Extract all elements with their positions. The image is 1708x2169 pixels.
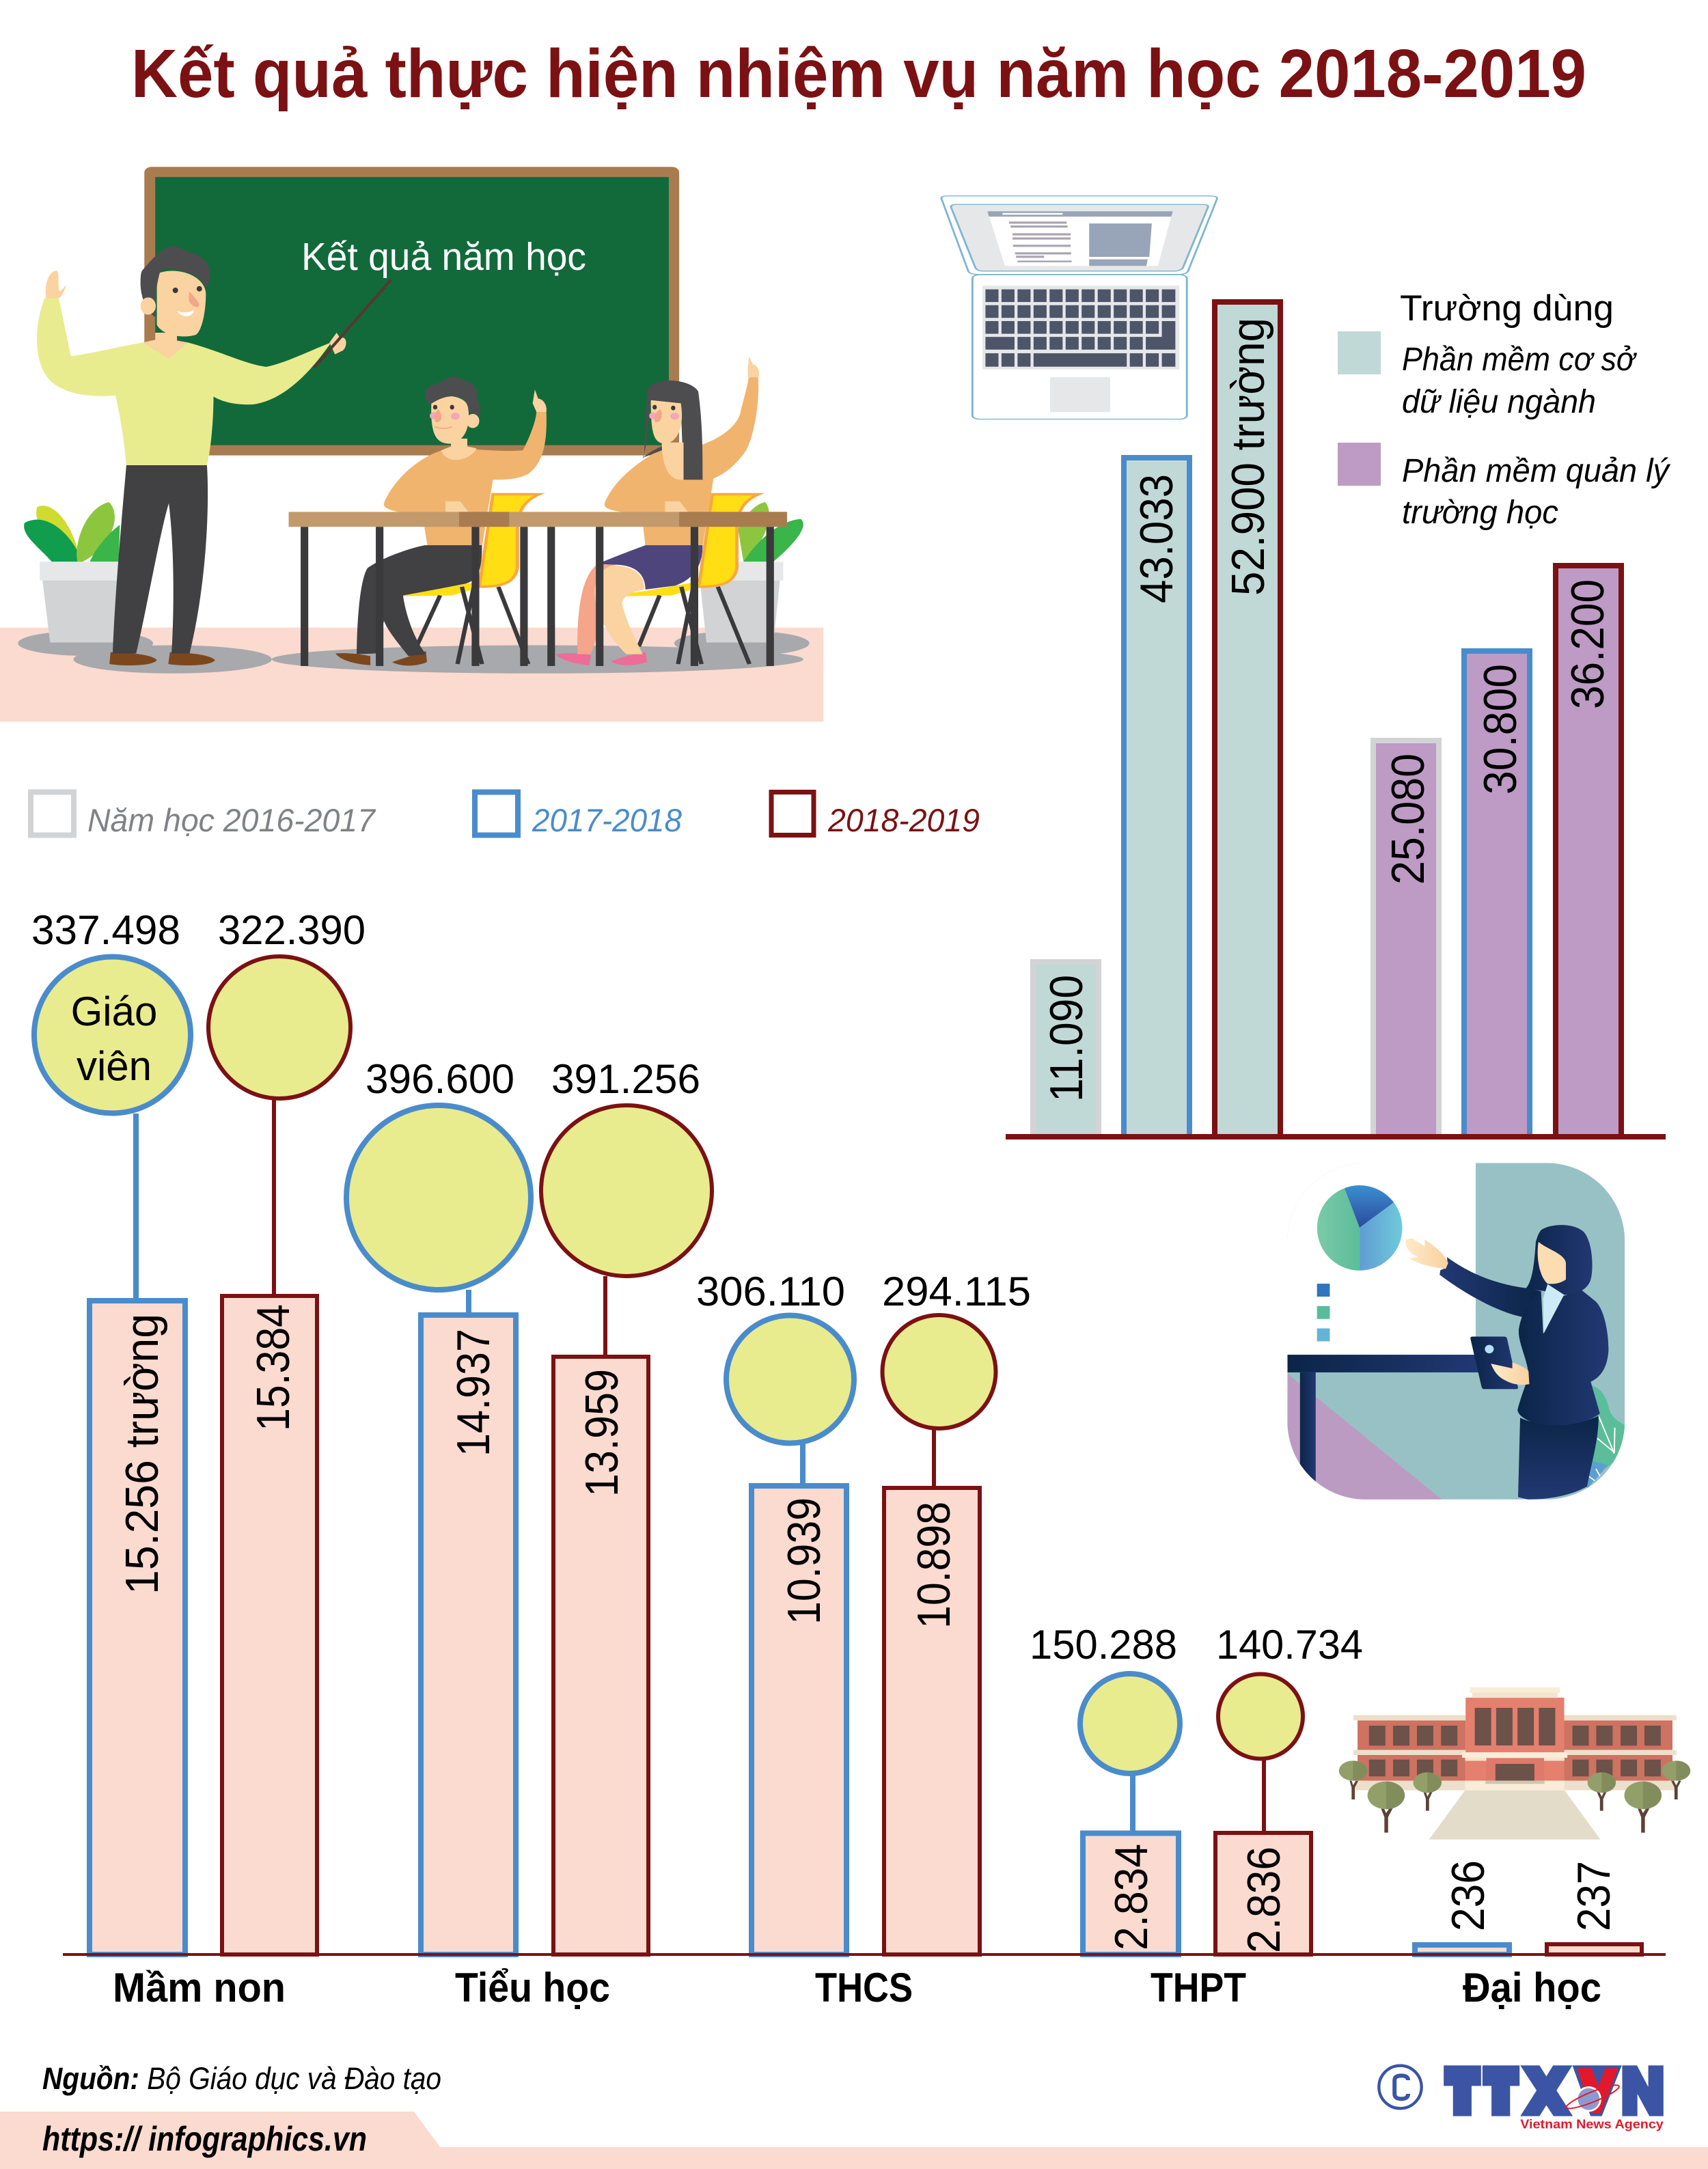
group: THCS 2018-2019: 10.898 <box>908 1502 960 1629</box>
group: Mầm non 2018-2019 <box>208 907 366 1954</box>
group: THPT 2018-2019: 140.734 <box>1216 1622 1363 1668</box>
plant right <box>700 502 803 642</box>
legend item: database software: Phần mềm cơ sở <box>1402 342 1638 378</box>
bar: 2018-2019 database software: 52.900 trường <box>1222 318 1274 596</box>
student boy <box>335 376 547 665</box>
group: THPT 2018-2019: 2.836 <box>1238 1847 1290 1953</box>
group: Tiểu học 2018-2019: 391.256 <box>551 1056 700 1102</box>
teacher <box>37 246 346 665</box>
category labels: Mầm non <box>113 1965 286 2011</box>
icon: laptop <box>941 196 1217 419</box>
legend item: management software <box>1338 443 1671 531</box>
bar: 2016-2017 database software: 11.090 <box>1041 975 1092 1102</box>
group: THCS 2018-2019 <box>882 1269 1031 1954</box>
floor <box>0 628 823 721</box>
illustration: presenter <box>1287 1163 1625 1500</box>
group: Tiểu học 2017-2018: 14.937 <box>447 1329 499 1456</box>
blackboard <box>144 167 679 456</box>
desks <box>289 512 787 666</box>
legend: school years <box>31 792 980 838</box>
illustration: university building <box>1339 1687 1690 1840</box>
bar: 2018-2019 management software <box>1556 566 1621 1137</box>
group: Mầm non 2017-2018 <box>31 907 191 1954</box>
bar: 2017-2018 database software <box>1124 458 1189 1137</box>
legend item: database software <box>1338 331 1638 420</box>
bar: 2016-2017 management software <box>1373 741 1439 1137</box>
legend item 2017-2018: 2017-2018 <box>532 802 682 838</box>
bar: 2016-2017 database software <box>1033 962 1099 1137</box>
group: THCS 2017-2018 <box>696 1269 854 1954</box>
illustration: classroom <box>0 167 823 721</box>
category labels <box>113 1965 1601 2011</box>
legend item 2018-2019: 2018-2019 <box>827 802 980 838</box>
group: Đại học 2017-2018 <box>1415 1860 1509 1954</box>
logo: TTXVN <box>1379 2065 1664 2131</box>
icon: copyright <box>1379 2066 1422 2108</box>
group: THPT 2017-2018: 2.834 <box>1105 1844 1157 1950</box>
group: Đại học 2017-2018: 236 <box>1442 1860 1494 1931</box>
group: Mầm non 2017-2018: Giáo <box>71 989 157 1034</box>
group: THPT 2017-2018 <box>1030 1622 1180 1954</box>
legend item: management software: trường học <box>1402 495 1558 531</box>
chairs <box>403 494 758 664</box>
website url: https:// infographics.vn <box>42 2120 367 2158</box>
chart: schools and teachers by level <box>31 907 1666 2011</box>
bar: 2018-2019 management software: 36.200 <box>1562 579 1614 709</box>
category labels: Đại học <box>1463 1965 1601 2011</box>
floor shadows <box>18 631 810 674</box>
group: Mầm non 2017-2018: 15.256 trường <box>116 1314 168 1594</box>
legend: software chart <box>1338 288 1671 531</box>
legend item: management software: Phần mềm quản lý <box>1402 453 1671 489</box>
group: Mầm non 2018-2019: 322.390 <box>218 907 366 953</box>
group: THCS 2017-2018: 10.939 <box>778 1497 830 1625</box>
bar: 2018-2019 database software <box>1215 302 1280 1137</box>
panel: software chart <box>1006 302 1666 1139</box>
group: Tiểu học 2018-2019: 13.959 <box>576 1369 628 1497</box>
group: Tiểu học 2018-2019 <box>541 1056 712 1954</box>
category labels: THCS <box>815 1965 913 2011</box>
plant left <box>24 502 120 642</box>
bar: 2016-2017 management software: 25.080 <box>1382 754 1434 885</box>
pointer stick <box>314 280 391 368</box>
group: Tiểu học 2017-2018: 396.600 <box>366 1056 514 1102</box>
legend heading: Trường dùng <box>1400 288 1614 329</box>
category labels: Tiểu học <box>455 1965 610 2011</box>
bar: 2017-2018 management software <box>1464 651 1530 1137</box>
group: Mầm non 2017-2018: viên <box>77 1043 152 1089</box>
bar: 2017-2018 management software: 30.800 <box>1474 664 1526 795</box>
group: Tiểu học 2017-2018 <box>346 1056 531 1954</box>
category labels: THPT <box>1151 1965 1246 2011</box>
footer band <box>0 2112 1708 2169</box>
legend item 2016-2017 <box>31 792 376 838</box>
pie legend <box>1317 1284 1330 1341</box>
axis <box>63 1953 1666 1956</box>
group: THPT 2018-2019 <box>1215 1622 1363 1954</box>
logo: TTXVN: Vietnam News Agency <box>1520 2116 1664 2131</box>
group: THCS 2017-2018: 306.110 <box>696 1269 845 1314</box>
legend item 2016-2017: Năm học 2016-2017 <box>87 802 376 838</box>
group: Mầm non 2017-2018: 337.498 <box>31 907 180 953</box>
title: Kết quả thực hiện nhiệm vụ năm học 2018-2019 <box>131 36 1586 112</box>
student girl <box>555 356 759 665</box>
group: THCS 2018-2019: 294.115 <box>882 1269 1031 1314</box>
blackboard caption: Kết quả năm học <box>301 235 586 279</box>
source text: Nguồn: Bộ Giáo dục và Đào tạo <box>42 2061 441 2096</box>
legend item 2017-2018 <box>475 792 682 838</box>
legend item 2018-2019 <box>771 792 980 838</box>
pie chart <box>1317 1185 1403 1271</box>
legend item: database software: dữ liệu ngành <box>1402 384 1596 420</box>
group: Đại học 2018-2019: 237 <box>1568 1861 1620 1931</box>
bar: 2017-2018 database software: 43.033 <box>1131 474 1183 603</box>
trees <box>1339 1760 1690 1833</box>
group: Mầm non 2018-2019: 15.384 <box>247 1304 299 1431</box>
group: Đại học 2018-2019 <box>1547 1861 1642 1954</box>
woman <box>1405 1225 1608 1500</box>
group: THPT 2017-2018: 150.288 <box>1030 1622 1177 1668</box>
axis <box>1006 1134 1666 1139</box>
